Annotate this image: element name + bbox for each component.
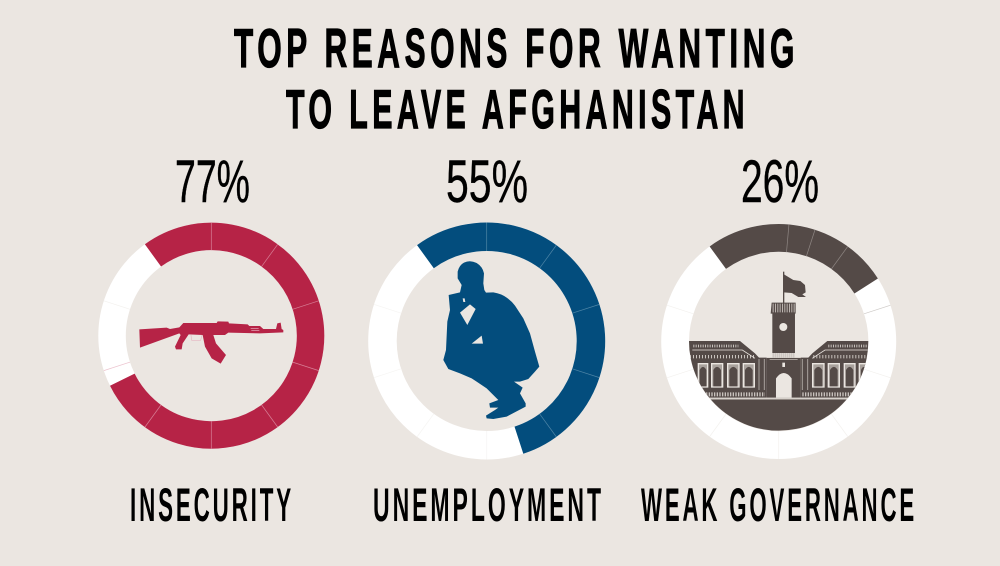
icon: palace building <box>685 272 875 432</box>
title <box>234 17 799 140</box>
donut chart: 77% <box>104 223 319 449</box>
panel: insecurity <box>104 148 319 531</box>
icon: crouching man <box>443 261 539 419</box>
text: UNEMPLOYMENT <box>373 478 604 531</box>
panel: insecurity: INSECURITY <box>130 478 294 531</box>
icon: rifle <box>139 321 283 364</box>
donut chart: 26% <box>667 224 890 459</box>
percentage: 55%: 55% <box>446 148 528 215</box>
percentage: 77%: 77% <box>175 148 250 215</box>
panel: unemployment <box>373 148 604 531</box>
percentage: 26%: 26% <box>741 148 819 215</box>
donut chart: 55% <box>374 222 599 460</box>
panel: weak governance <box>641 148 917 531</box>
